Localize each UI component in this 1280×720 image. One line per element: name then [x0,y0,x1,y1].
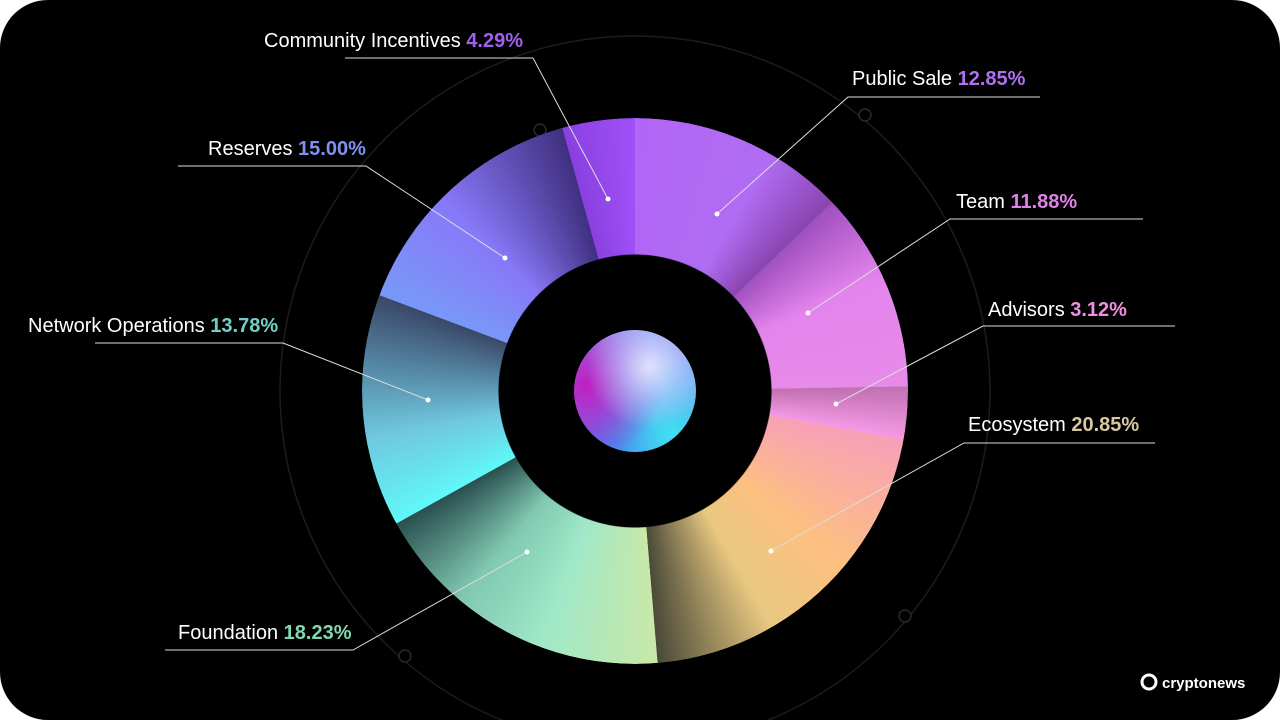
donut chart [362,118,908,664]
label: Reserves: Reserves 15.00% [208,138,366,160]
label: Public Sale: Public Sale 12.85% [852,68,1026,90]
label: Public Sale [714,68,1040,216]
label: Advisors: Advisors 3.12% [988,299,1127,321]
label: Foundation [165,550,530,650]
label: Ecosystem [768,414,1155,554]
label: Foundation: Foundation 18.23% [178,622,352,644]
logo: cryptonews: cryptonews [1162,675,1245,692]
label: Team [806,191,1143,316]
label: Community Incentives [264,30,610,202]
label: Ecosystem: Ecosystem 20.85% [968,414,1139,436]
label: Community Incentives: Community Incentives 4.29% [264,30,523,52]
label: Network Operations [28,315,430,402]
label: Reserves [178,138,508,260]
label: Advisors [834,299,1175,406]
label: Team: Team 11.88% [956,191,1077,213]
label: Network Operations: Network Operations 13.78% [28,315,278,337]
icon: center sphere [574,330,696,452]
